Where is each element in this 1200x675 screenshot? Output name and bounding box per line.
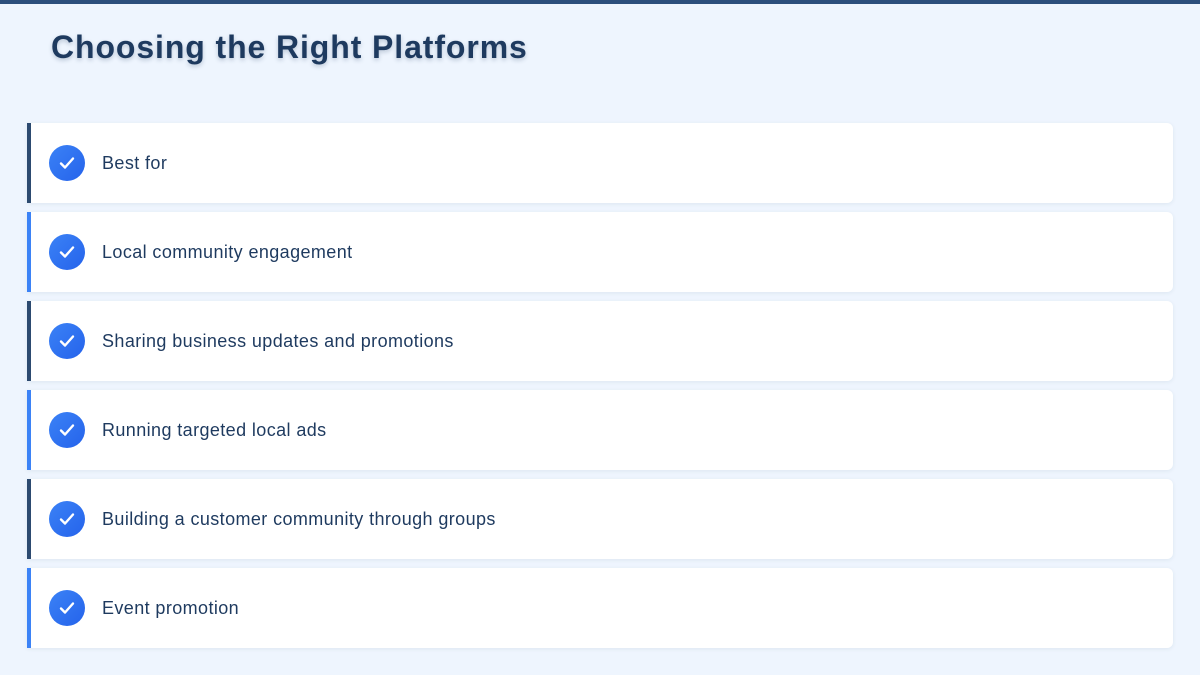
card: best for: Best for — [102, 152, 167, 172]
title: Choosing the Right Platforms — [51, 29, 528, 65]
card: ads: Running targeted local ads — [102, 420, 327, 440]
card: sharing updates — [27, 301, 1173, 381]
card: groups — [27, 479, 1173, 559]
card: best for — [27, 123, 1173, 203]
card: local community — [27, 212, 1173, 292]
card: events — [27, 568, 1173, 648]
card: local community: Local community engagement — [102, 242, 353, 262]
card: events: Event promotion — [102, 598, 239, 618]
card: groups: Building a customer community through groups — [102, 508, 496, 528]
card: ads — [27, 390, 1173, 470]
card: sharing updates: Sharing business updates and promotions — [102, 330, 454, 350]
list of cards — [26, 123, 1174, 650]
